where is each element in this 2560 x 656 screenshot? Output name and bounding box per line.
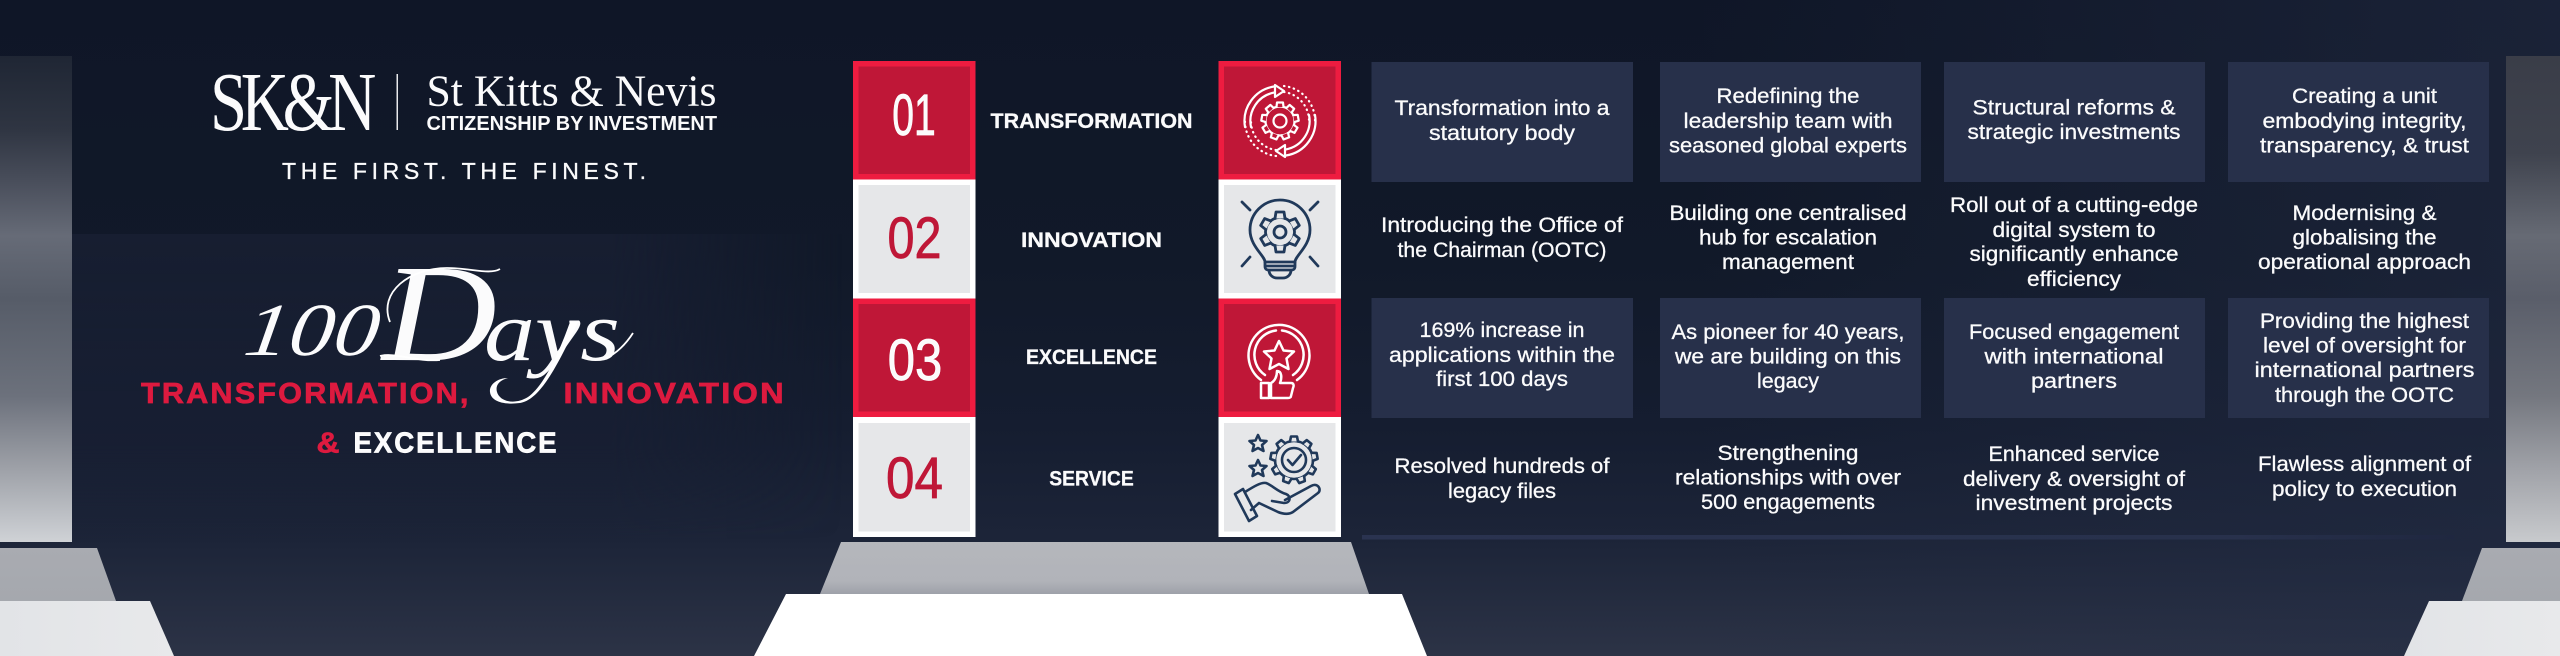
text: modernising: Modernising & [2292,202,2436,225]
text: enhanced service delivery: investment projects [1976,492,2172,515]
row 4 service text [1394,442,2471,515]
text: structural reforms: Structural reforms & [1972,96,2176,120]
text: 169% increase: applications within the [1389,344,1615,367]
text: highest level of oversight: through the OOTC [2275,384,2454,407]
text: legacy files: Resolved hundreds of [1394,455,1610,478]
text: transformation into a statutory body: statutory body [1429,122,1576,145]
text: centralised hub [1670,202,1906,274]
text: pioneer for 40 years: As pioneer for 40 years, [1672,321,1904,344]
subtitle [141,378,786,460]
text: flawless alignment: policy to execution [2272,478,2457,501]
stage: centre steps [754,542,1427,656]
text: 169% increase: first 100 days [1436,368,1568,391]
text: modernising [2258,202,2471,274]
text: pioneer for 40 years [1672,321,1904,393]
text: transformation into a statutory body: Transformation into a [1394,97,1610,120]
text: pioneer for 40 years: we are building on this [1674,346,1901,368]
text: modernising: globalising the [2292,226,2436,250]
text: highest level of oversight [2254,310,2474,407]
text: office of the chairman: the Chairman (OOTC) [1398,239,1606,262]
text: redefining the leadership team [1669,85,1907,158]
text: highest level of oversight: Providing the highest [2260,310,2469,333]
logo: SK&N St Kitts & Nevis [210,56,717,149]
logo: SK&N St Kitts & Nevis: St Kitts & Nevis [426,66,716,116]
text: creating a unit: transparency, & trust [2260,134,2469,158]
row 3 excellence text [1389,310,2474,407]
row 2 innovation text [1381,194,2471,291]
text: structural reforms [1968,96,2180,144]
text: digital system: Roll out of a cutting-edge [1950,194,2198,217]
stage: right pillar and steps [2404,56,2560,656]
tagline: THE FIRST. THE FINEST. [282,158,646,184]
label: innovation: INNOVATION [1021,228,1162,252]
subtitle: INNOVATION [564,378,786,410]
subtitle: TRANSFORMATION, [141,378,470,410]
heading: 100 Days [240,237,633,404]
heading: 100 Days: 100 [240,289,385,372]
text: focused engagement: partners [2031,370,2117,393]
text: transformation into a statutory body [1394,97,1610,145]
heading: 100 Days: ays [484,283,620,379]
text: redefining the leadership team: Redefining the [1716,85,1860,108]
text: 169% increase [1389,319,1615,391]
bottom rule [1362,535,2454,540]
text: digital system: efficiency [2027,268,2122,291]
text: creating a unit: Creating a unit [2292,85,2437,108]
number 04: 04 [886,446,943,511]
text: strengthening relationships: 500 engagements [1701,491,1875,514]
text: flawless alignment [2258,453,2471,501]
icon: light bulb gear [1218,180,1341,298]
text: flawless alignment: Flawless alignment of [2258,453,2471,476]
number column [853,61,976,537]
text: focused engagement: Focused engagement [1969,321,2179,344]
text: redefining the leadership team: leadership team with [1684,110,1892,133]
label: transformation: TRANSFORMATION [990,109,1192,133]
text: office of the chairman [1381,214,1623,262]
number 03: 03 [888,328,942,393]
cards: shaded rows [1372,62,2489,418]
subtitle: EXCELLENCE [354,428,558,460]
number 04 [853,417,976,537]
text: modernising: operational approach [2258,251,2471,274]
icon: hand with gear and stars [1218,417,1341,537]
number 02 [853,180,976,298]
text: enhanced service delivery: Enhanced service [1988,443,2160,466]
text: focused engagement: with international [1983,346,2164,368]
text: digital system: significantly enhance [1970,243,2178,266]
text: legacy files [1394,455,1610,503]
text: centralised hub: management [1722,251,1854,274]
number 01 [853,61,976,180]
logo: SK&N St Kitts & Nevis: SK&N [210,56,375,149]
row 1 transformation text [1394,85,2469,158]
text: focused engagement [1969,321,2179,393]
heading: 100 Days: D [380,237,497,391]
text: 169% increase: 169% increase in [1420,319,1584,342]
text: enhanced service delivery: delivery & oversight of [1963,468,2185,491]
text: highest level of oversight: international partners [2254,359,2474,382]
text: legacy files: legacy files [1448,480,1556,503]
label: excellence: EXCELLENCE [1026,345,1157,369]
text: centralised hub: hub for escalation [1699,226,1877,250]
number 03 [853,298,976,417]
text: enhanced service delivery [1963,443,2185,515]
text: digital system: digital system to [1992,219,2156,242]
text: strengthening relationships: Strengthening [1718,442,1858,465]
number 02: 02 [888,206,942,271]
logo: SK&N St Kitts & Nevis: CITIZENSHIP BY INVESTMENT [426,112,717,135]
icon: transformation cycle gear [1218,61,1341,180]
text: centralised hub: Building one centralised [1670,202,1906,225]
stage: left pillar and steps [0,56,174,656]
row labels [990,109,1192,490]
text: structural reforms: strategic investments [1968,121,2180,144]
text: pioneer for 40 years: legacy [1757,370,1820,393]
text: strengthening relationships [1675,442,1901,514]
icon column [1218,61,1341,537]
label: service: SERVICE [1049,466,1134,490]
text: strengthening relationships: relationships with over [1675,466,1901,490]
text: office of the chairman: Introducing the Office of [1381,214,1623,237]
text: redefining the leadership team: seasoned global experts [1669,134,1907,158]
text: digital system [1950,194,2198,291]
text: creating a unit: embodying integrity, [2262,110,2466,133]
subtitle: & [316,428,340,460]
text: creating a unit [2260,85,2469,158]
text: highest level of oversight: level of oversight for [2263,334,2466,358]
icon: medal star thumbs up [1218,298,1341,417]
number 01: 01 [892,83,936,148]
